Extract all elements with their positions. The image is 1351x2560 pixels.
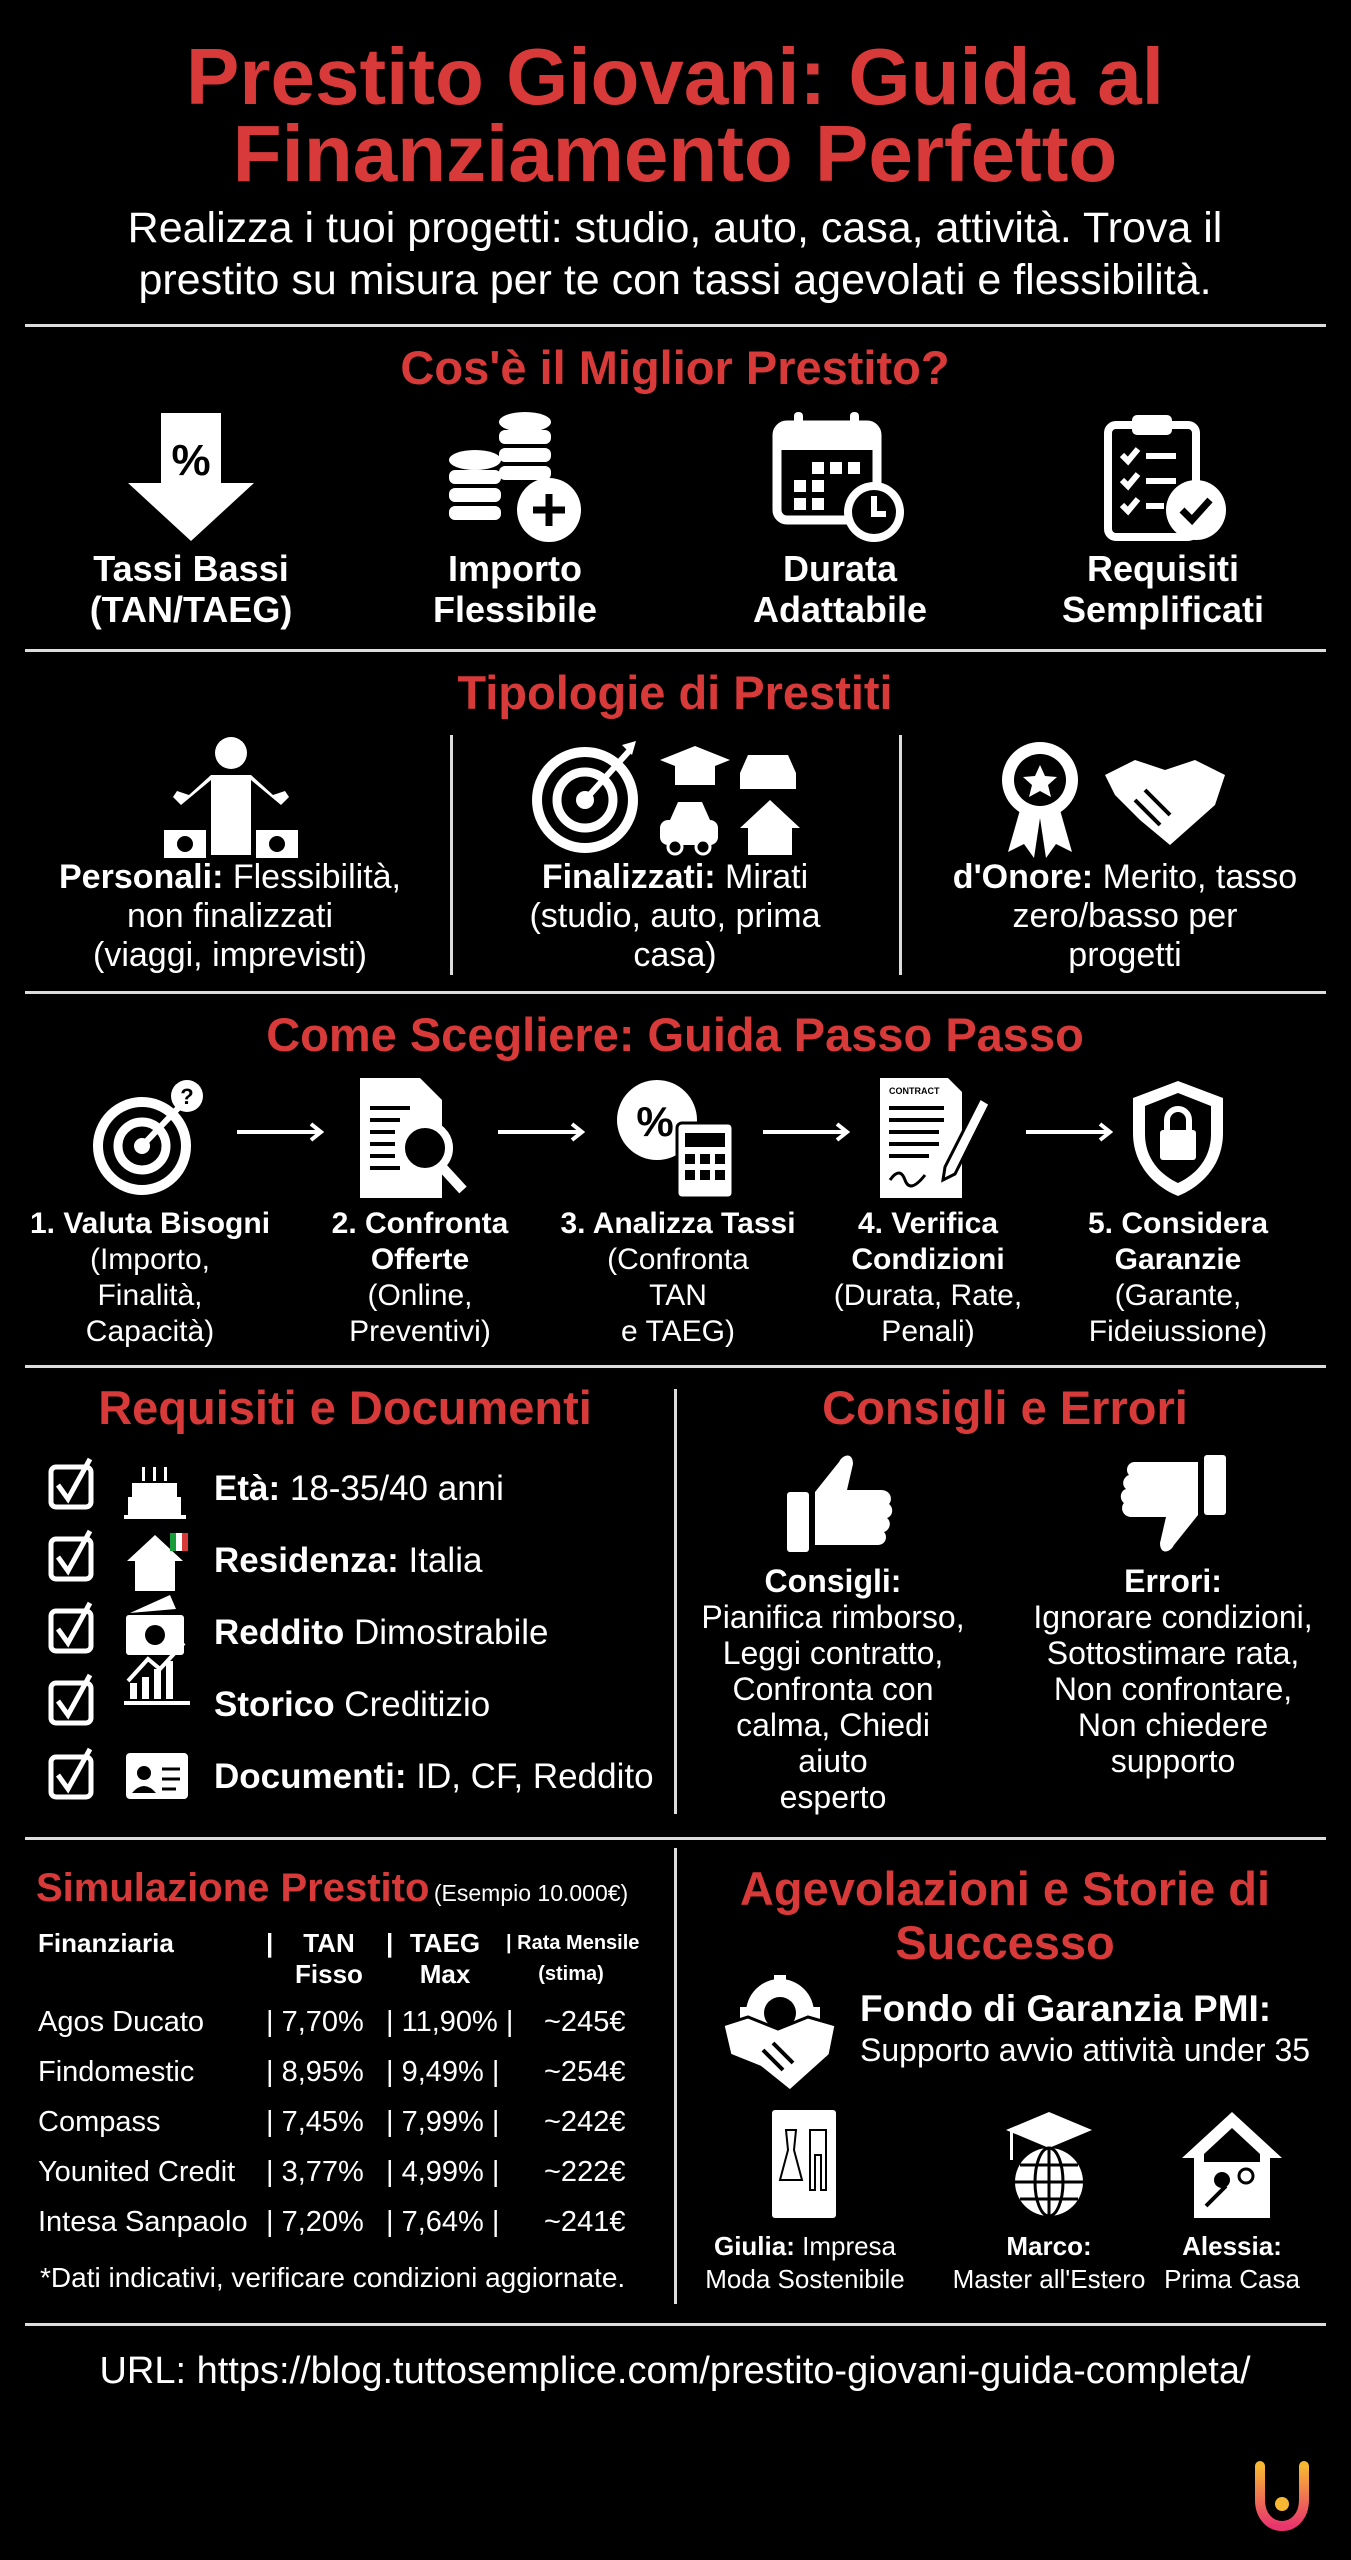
table: simulazione: ~241€ (544, 2206, 625, 2238)
text: consigli: aiuto (798, 1743, 868, 1779)
icon: contract pen: CONTRACT (889, 1086, 940, 1096)
arrow 4 (1026, 1122, 1114, 1142)
panel: finalizzati (529, 741, 821, 974)
table: simulazione: | 7,64% | (386, 2206, 499, 2238)
icon: target with goals (532, 741, 800, 856)
text: errori: Errori: (1124, 1563, 1222, 1599)
text: fondo garanzia: Fondo di Garanzia PMI: (860, 1988, 1271, 2029)
step 3 text (560, 1207, 796, 1348)
step 2 text: Offerte (371, 1243, 469, 1276)
icon: thumbs down (1118, 1452, 1228, 1557)
text: consigli: Leggi contratto, (723, 1635, 943, 1671)
title: Prestito Giovani: Guida al (186, 32, 1164, 121)
panel: requisiti (48, 1381, 654, 1800)
table: simulazione: Findomestic (38, 2056, 194, 2088)
icon: percent arrow (128, 413, 254, 541)
table: simulazione: Agos Ducato (38, 2006, 204, 2038)
icon: clipboard check (1104, 415, 1226, 541)
label: Durata Adattabile: Durata (783, 548, 897, 589)
table: simulazione: | 7,45% (266, 2106, 364, 2138)
table: simulazione: Younited Credit (38, 2156, 235, 2188)
step 5 text (1088, 1207, 1268, 1348)
heading: requisiti: Requisiti e Documenti (98, 1381, 592, 1434)
table: simulazione: Intesa Sanpaolo (38, 2206, 248, 2238)
label: Tassi Bassi: Tassi Bassi (93, 548, 289, 589)
label: Durata Adattabile: Adattabile (753, 589, 927, 630)
label: Importo Flessibile: Flessibile (433, 589, 597, 630)
icon: percent calculator: % (636, 1098, 674, 1145)
text: consigli: Consigli: (765, 1563, 901, 1599)
table: simulazione: | 7,20% (266, 2206, 364, 2238)
text: fondo garanzia: Supporto avvio attività under 35 (860, 2032, 1310, 2068)
text: consigli: Confronta con (732, 1671, 934, 1707)
panel: agevolazioni: Prima Casa (1164, 2264, 1300, 2294)
icon: target question (93, 1080, 203, 1195)
label: Durata Adattabile (753, 548, 927, 630)
step 4 text: Penali) (881, 1315, 975, 1348)
step 3 text: 3. Analizza Tassi (560, 1207, 796, 1240)
icon: person with money (164, 737, 298, 858)
table: simulazione: TAN (303, 1928, 355, 1958)
story: Giulia (730, 2110, 880, 2218)
text: finalizzati: Finalizzati: Mirati (542, 858, 808, 896)
text: personali (59, 858, 401, 974)
list text: Reddito Dimostrabile (214, 1613, 548, 1652)
text: consigli: esperto (780, 1779, 886, 1815)
text: finalizzati (529, 858, 821, 974)
text: errori: Ignorare condizioni, (1033, 1599, 1313, 1635)
panel: agevolazioni: Moda Sostenibile (705, 2264, 905, 2294)
url: URL: https://blog.tuttosemplice.com/prestito-giovani-guida-completa/ (99, 2350, 1251, 2392)
story: Marco (1004, 2110, 1094, 2220)
list text (214, 1469, 654, 1796)
text: consigli: Pianifica rimborso, (701, 1599, 965, 1635)
text: finalizzati: casa) (633, 936, 717, 974)
arrow 1 (237, 1122, 324, 1142)
list: requisiti (48, 1458, 654, 1800)
step 2 text (332, 1207, 508, 1348)
icon: contract pen (880, 1078, 988, 1198)
step 3 text: TAN (649, 1279, 707, 1312)
title (186, 32, 1164, 198)
step 2 text: (Online, (367, 1279, 473, 1312)
list text: Storico Creditizio (214, 1685, 490, 1724)
panel: agevolazioni: Alessia: (1182, 2231, 1282, 2261)
step 2 text: 2. Confronta (332, 1207, 508, 1240)
icon: target question: ? (180, 1084, 194, 1109)
table: simulazione: | 9,49% | (386, 2056, 499, 2088)
text: errori: Non chiedere (1078, 1707, 1268, 1743)
list text: Età: 18-35/40 anni (214, 1469, 504, 1508)
heading: agevolazioni (740, 1862, 1270, 1970)
title: Finanziamento Perfetto (233, 109, 1117, 198)
table: simulazione: | (266, 1928, 273, 1958)
heading: simulazione: Simulazione Prestito (Esempio 10.000€) (36, 1866, 628, 1910)
step 5 text: Fideiussione) (1089, 1315, 1267, 1348)
table: simulazione: Finanziaria (38, 1928, 174, 1958)
panel: agevolazioni: Marco: (1006, 2231, 1092, 2261)
panel: simulazione (0, 1860, 670, 2300)
subtitle: prestito su misura per te con tassi agevolati e flessibilità. (138, 256, 1212, 304)
text: d'onore: d'Onore: Merito, tasso (953, 858, 1297, 896)
text: finalizzati: (studio, auto, prima (529, 897, 821, 935)
arrow 2 (498, 1122, 586, 1142)
step 1 text (30, 1207, 270, 1348)
table: simulazione: | 7,99% | (386, 2106, 499, 2138)
panel: agevolazioni: Giulia: Impresa (714, 2231, 896, 2261)
text: personali: Personali: Flessibilità, (59, 858, 401, 896)
step 4 text: Condizioni (851, 1243, 1005, 1276)
text: personali: non finalizzati (127, 897, 333, 935)
list text: Residenza: Italia (214, 1541, 482, 1580)
table: simulazione: | 7,70% (266, 2006, 364, 2038)
table: simulazione: | Rata Mensile (506, 1932, 639, 1954)
heading: Come Scegliere: Come Scegliere: Guida Passo Passo (266, 1008, 1084, 1061)
heading: consigli e errori: Consigli e Errori (822, 1381, 1188, 1434)
heading: agevolazioni: Successo (895, 1916, 1115, 1969)
text: errori: Non confrontare, (1054, 1671, 1292, 1707)
step 2 text: Preventivi) (349, 1315, 491, 1348)
panel: consigli e errori (701, 1381, 1313, 1815)
icon: percent arrow: % (171, 436, 211, 485)
step 4 text: 4. Verifica (858, 1207, 998, 1240)
label: Requisiti Semplificati: Semplificati (1062, 589, 1264, 630)
step 1 text: Finalità, (97, 1279, 203, 1312)
label: Requisiti Semplificati: Requisiti (1087, 548, 1239, 589)
table: simulazione: | 4,99% | (386, 2156, 499, 2188)
arrow 3 (763, 1122, 850, 1142)
text: consigli (701, 1563, 965, 1815)
text: errori: Sottostimare rata, (1047, 1635, 1299, 1671)
text: d'onore: progetti (1068, 936, 1182, 974)
step 5 text: (Garante, (1115, 1279, 1241, 1312)
panel: personali (59, 737, 401, 974)
label: Importo Flessibile: Importo (448, 548, 582, 589)
text: personali: (viaggi, imprevisti) (93, 936, 367, 974)
label: Tassi Bassi (90, 548, 292, 630)
label: Importo Flessibile (433, 548, 597, 630)
icon: award and handshake (1002, 742, 1225, 858)
table: simulazione: Fisso (295, 1959, 363, 1989)
label: Tassi Bassi: (TAN/TAEG) (90, 589, 292, 630)
icon: gear handshake (718, 1975, 843, 2093)
panel: features (90, 412, 1264, 630)
icon: thumbs up (787, 1456, 892, 1552)
panel: steps (30, 1078, 1268, 1348)
text: d'onore (953, 858, 1297, 974)
step 5 text: Garanzie (1115, 1243, 1241, 1276)
table: simulazione: | 8,95% (266, 2056, 364, 2088)
step 3 text: e TAEG) (621, 1315, 735, 1348)
step 1 text: Capacità) (86, 1315, 214, 1348)
step 5 text: 5. Considera (1088, 1207, 1268, 1240)
subtitle: Realizza i tuoi progetti: studio, auto, casa, attività. Trova il (128, 204, 1222, 252)
step 1 text: 1. Valuta Bisogni (30, 1207, 270, 1240)
table: simulazione: TAEG (410, 1928, 480, 1958)
table: simulazione: ~254€ (544, 2056, 625, 2088)
table: simulazione: | 3,77% (266, 2156, 364, 2188)
text: consigli: calma, Chiedi (736, 1707, 930, 1743)
table: simulazione: ~242€ (544, 2106, 625, 2138)
heading: Tipologie di Prestiti: Tipologie di Prestiti (457, 666, 893, 719)
icon: shield lock (1133, 1081, 1223, 1196)
text: fondo garanzia (860, 1988, 1310, 2069)
table: simulazione (0, 1928, 670, 2248)
heading: Cos'è il Miglior Prestito: Cos'è il Miglior Prestito? (400, 341, 950, 394)
step 1 text: (Importo, (90, 1243, 210, 1276)
step 4 text: (Durata, Rate, (834, 1279, 1022, 1312)
icon: document search (360, 1078, 467, 1198)
text: errori (1033, 1563, 1313, 1779)
icon: calendar clock (772, 412, 904, 542)
table: simulazione: ~245€ (544, 2006, 625, 2038)
footnote: *Dati indicativi, verificare condizioni aggiornate. (40, 2262, 625, 2293)
step 4 text (834, 1207, 1022, 1348)
step 3 text: (Confronta (607, 1243, 749, 1276)
panel: agevolazioni: Master all'Estero (953, 2264, 1145, 2294)
table: simulazione: ~222€ (544, 2156, 625, 2188)
list text: Documenti: ID, CF, Reddito (214, 1757, 654, 1796)
table: simulazione: Max (420, 1959, 470, 1989)
panel: d'onore (953, 742, 1297, 974)
text: errori: supporto (1111, 1743, 1235, 1779)
text: d'onore: zero/basso per (1013, 897, 1237, 935)
label: Requisiti Semplificati (1062, 548, 1264, 630)
table: simulazione: Compass (38, 2106, 160, 2138)
icon: coins plus (449, 412, 581, 542)
table: simulazione: (stima) (538, 1963, 604, 1985)
logo (1252, 2460, 1312, 2532)
icon: percent calculator (617, 1080, 732, 1196)
table: simulazione: | (386, 1928, 393, 1958)
story: Alessia (1180, 2110, 1284, 2220)
table: simulazione: | 11,90% | (386, 2006, 513, 2038)
heading: agevolazioni: Agevolazioni e Storie di (740, 1862, 1270, 1915)
panel: agevolazioni (690, 1860, 1330, 2300)
subtitle (128, 204, 1222, 304)
